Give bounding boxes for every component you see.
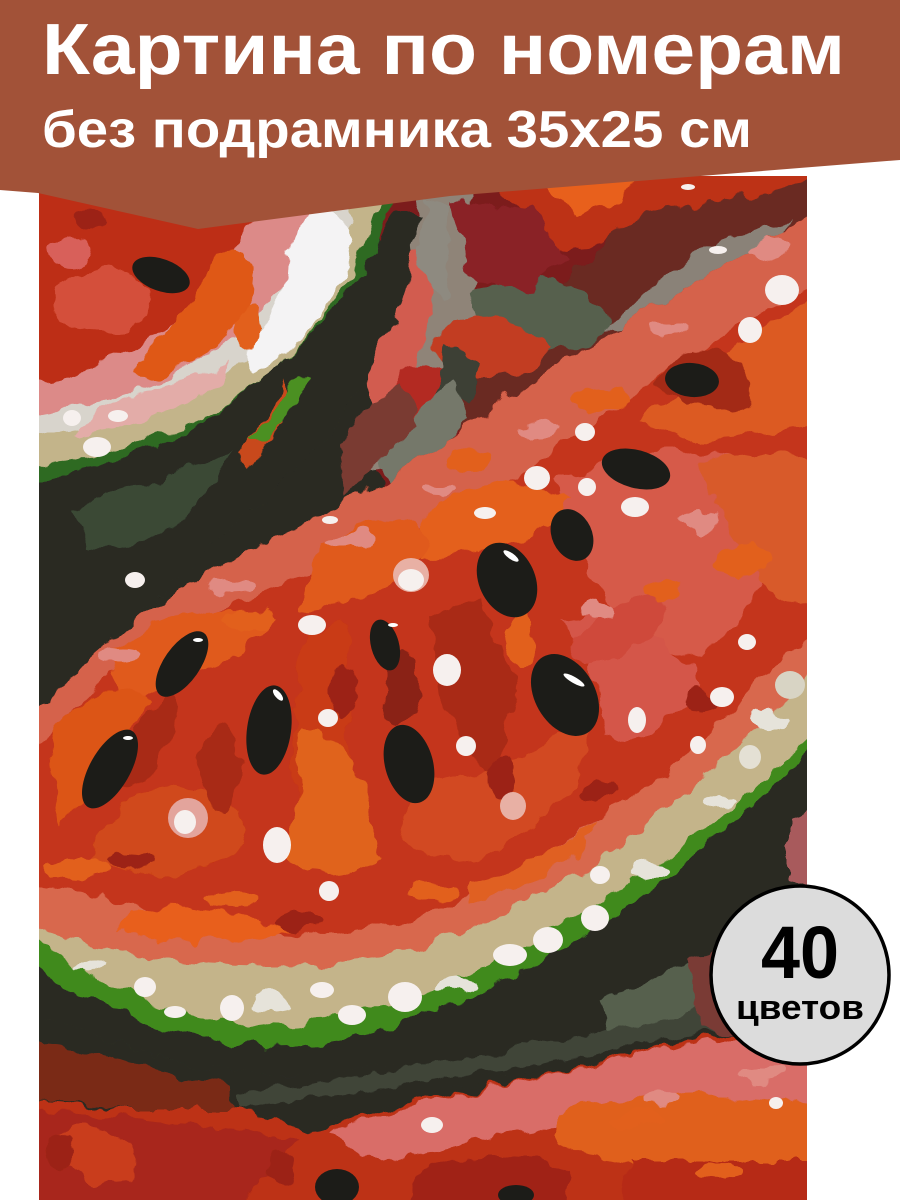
water drops [63,184,805,1133]
bottom slice [20,1035,830,1200]
top-left slice [39,193,393,483]
center slice: rind [39,674,807,1052]
subtitle: без подрамника 35х25 см [42,101,752,159]
badge label: цветов [736,989,864,1027]
paint blotches [44,210,792,1190]
dark rind left [65,210,423,550]
title: Картина по номерам [42,10,845,90]
badge: 40 colours [711,886,889,1064]
badge number: 40 [761,911,839,994]
painting: watermelon slices [20,160,830,1200]
center slice: flesh [20,205,830,965]
seed highlights [123,548,586,740]
header banner [0,0,900,229]
top middle background [340,176,807,496]
lower right dark area [39,810,807,1114]
seeds [71,250,720,1200]
